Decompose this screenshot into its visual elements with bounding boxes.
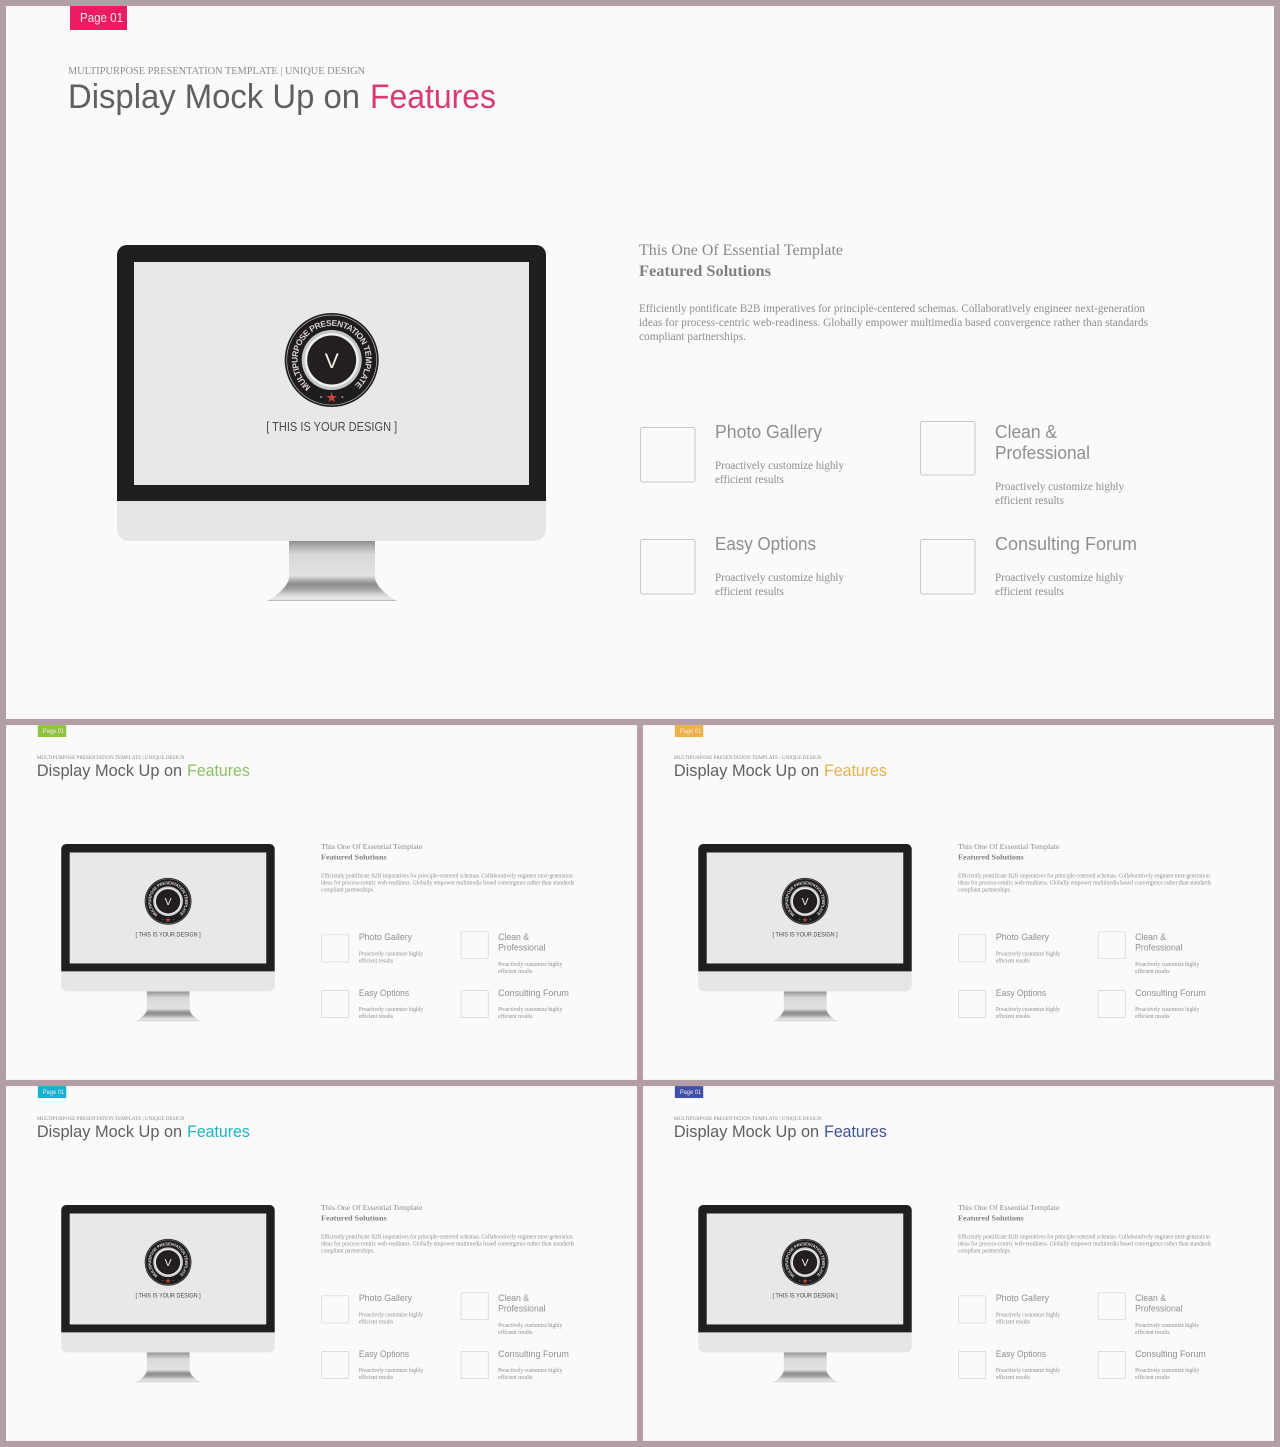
feature: photo gallery: Photo Gallery [715, 422, 822, 442]
logo badge: V [165, 897, 172, 908]
page tag: Page 01 [680, 1089, 702, 1096]
feature: clean and professional: efficient results [1135, 1329, 1170, 1336]
feature: clean and professional: Professional [995, 443, 1090, 463]
logo badge: MULTIPURPOSE PRESENTATION TEMPLATE [785, 881, 825, 917]
panel: navy slide [643, 1086, 1274, 1441]
feature: clean and professional: Clean & [995, 422, 1057, 442]
feature: photo gallery: efficient results [996, 957, 1031, 964]
title block: MULTIPURPOSE PRESENTATION TEMPLATE | UNIQUE DESIGN [37, 755, 185, 761]
feature: photo gallery: Photo Gallery [359, 1293, 413, 1303]
feature: easy options: Easy Options [996, 988, 1047, 998]
intro text: compliant partnerships. [321, 887, 375, 893]
page tag [38, 725, 66, 737]
feature: consulting forum [920, 534, 1137, 598]
feature: consulting forum: Consulting Forum [1135, 988, 1206, 998]
feature: easy options: Easy Options [715, 534, 816, 554]
feature: clean and professional [920, 422, 1124, 507]
feature: consulting forum: efficient results [1135, 1013, 1170, 1020]
feature: consulting forum: Consulting Forum [995, 534, 1137, 554]
feature: photo gallery: Proactively customize highly [715, 460, 844, 472]
feature: consulting forum: efficient results [1135, 1374, 1170, 1381]
title block: Features [187, 1122, 250, 1141]
title block: Features [824, 1122, 887, 1141]
feature: consulting forum: Consulting Forum [1135, 1349, 1206, 1359]
title block: Display Mock Up on [37, 1122, 182, 1141]
feature: easy options: Easy Options [359, 1349, 410, 1359]
intro text: Efficiently pontificate B2B imperatives for principle-centered schemas. Collaboratively engineer next-generation [639, 303, 1145, 315]
panel: orange slide [643, 725, 1274, 1080]
title block: Features [824, 761, 887, 780]
feature: easy options: efficient results [996, 1374, 1031, 1381]
feature: easy options [640, 534, 844, 598]
intro text: Efficiently pontificate B2B imperatives for principle-centered schemas. Collaboratively engineer next-generation [958, 872, 1210, 879]
feature: consulting forum: Proactively customize highly [1135, 1368, 1199, 1374]
feature: easy options: efficient results [359, 1013, 394, 1020]
feature: clean and professional: Proactively customize highly [995, 481, 1124, 493]
title block [68, 65, 496, 116]
screen caption: [ THIS IS YOUR DESIGN ] [135, 932, 201, 939]
feature: easy options: efficient results [359, 1374, 394, 1381]
feature: clean and professional: efficient results [995, 495, 1065, 507]
feature: consulting forum: efficient results [498, 1374, 533, 1381]
feature: photo gallery: efficient results [996, 1318, 1031, 1325]
feature: easy options [322, 988, 423, 1020]
feature: consulting forum [1098, 1349, 1206, 1381]
feature: photo gallery: Photo Gallery [996, 932, 1050, 942]
intro text: Featured Solutions [958, 852, 1024, 861]
feature: photo gallery: Proactively customize highly [996, 1312, 1060, 1318]
feature: consulting forum [461, 1349, 569, 1381]
intro text: ideas for process-centric web-readiness. Globally empower multimedia based convergence rather than standards [321, 879, 575, 886]
logo badge: MULTIPURPOSE PRESENTATION TEMPLATE [148, 1242, 188, 1278]
feature: photo gallery [322, 932, 423, 964]
logo badge: MULTIPURPOSE PRESENTATION TEMPLATE [292, 320, 372, 391]
feature: easy options: Proactively customize highly [996, 1368, 1060, 1374]
feature: clean and professional [461, 1293, 562, 1336]
intro text: Featured Solutions [321, 1213, 387, 1222]
page tag: Page 01 [680, 728, 702, 735]
feature: photo gallery: Photo Gallery [359, 932, 413, 942]
title block: MULTIPURPOSE PRESENTATION TEMPLATE | UNIQUE DESIGN [674, 1116, 822, 1122]
feature: photo gallery: Proactively customize highly [359, 1312, 423, 1318]
title block: Features [370, 78, 496, 116]
feature: clean and professional: Professional [1135, 1304, 1182, 1314]
feature: photo gallery [959, 932, 1060, 964]
feature: consulting forum: Consulting Forum [498, 988, 569, 998]
intro text: Efficiently pontificate B2B imperatives for principle-centered schemas. Collaboratively engineer next-generation [321, 1233, 573, 1240]
screen caption: [ THIS IS YOUR DESIGN ] [772, 1293, 838, 1300]
logo badge: V [165, 1258, 172, 1269]
feature: photo gallery: efficient results [359, 957, 394, 964]
intro text [321, 1203, 575, 1254]
feature: photo gallery: efficient results [359, 1318, 394, 1325]
intro text: ideas for process-centric web-readiness. Globally empower multimedia based convergence rather than standards [321, 1240, 575, 1247]
feature: clean and professional [461, 932, 562, 975]
intro text [639, 242, 1149, 343]
intro text: compliant partnerships. [958, 887, 1012, 893]
feature: clean and professional: efficient results [498, 968, 533, 975]
intro text: Efficiently pontificate B2B imperatives for principle-centered schemas. Collaboratively engineer next-generation [958, 1233, 1210, 1240]
intro text: ideas for process-centric web-readiness. Globally empower multimedia based convergence rather than standards [639, 317, 1149, 329]
feature: consulting forum: Proactively customize highly [498, 1007, 562, 1013]
feature: consulting forum: Proactively customize highly [995, 572, 1124, 584]
feature: easy options [322, 1349, 423, 1381]
intro text [321, 842, 575, 893]
intro text: Featured Solutions [321, 852, 387, 861]
monitor mockup [117, 245, 546, 601]
feature: photo gallery [640, 422, 844, 486]
intro text: compliant partnerships. [958, 1248, 1012, 1254]
title block [674, 755, 887, 780]
feature: easy options: Easy Options [359, 988, 410, 998]
feature: easy options: Proactively customize highly [359, 1368, 423, 1374]
intro text: compliant partnerships. [639, 331, 746, 343]
feature: clean and professional: efficient results [498, 1329, 533, 1336]
logo badge: MULTIPURPOSE PRESENTATION TEMPLATE [785, 1242, 825, 1278]
feature: clean and professional [1098, 932, 1199, 975]
feature: photo gallery [322, 1293, 423, 1325]
screen caption: [ THIS IS YOUR DESIGN ] [772, 932, 838, 939]
feature: easy options: efficient results [715, 586, 785, 598]
feature: consulting forum: Proactively customize highly [498, 1368, 562, 1374]
panel: green slide [6, 725, 637, 1080]
feature: clean and professional: Professional [498, 1304, 545, 1314]
feature: clean and professional: Clean & [1135, 1293, 1166, 1303]
title block: Display Mock Up on [37, 761, 182, 780]
feature: photo gallery [959, 1293, 1060, 1325]
title block: MULTIPURPOSE PRESENTATION TEMPLATE | UNIQUE DESIGN [674, 755, 822, 761]
title block [37, 755, 250, 780]
title block: MULTIPURPOSE PRESENTATION TEMPLATE | UNIQUE DESIGN [68, 65, 365, 77]
intro text: compliant partnerships. [321, 1248, 375, 1254]
feature: clean and professional: Proactively customize highly [498, 962, 562, 968]
feature: consulting forum: Consulting Forum [498, 1349, 569, 1359]
intro text: This One Of Essential Template [958, 1203, 1060, 1212]
monitor mockup [61, 1205, 275, 1382]
intro text: ideas for process-centric web-readiness. Globally empower multimedia based convergence rather than standards [958, 879, 1212, 886]
title block [37, 1116, 250, 1141]
title block: MULTIPURPOSE PRESENTATION TEMPLATE | UNIQUE DESIGN [37, 1116, 185, 1122]
intro text: Featured Solutions [639, 263, 771, 280]
intro text: This One Of Essential Template [321, 1203, 423, 1212]
monitor mockup [61, 844, 275, 1022]
page tag [675, 725, 703, 737]
panel: main slide (pink) [6, 6, 1274, 719]
intro text: This One Of Essential Template [958, 842, 1060, 851]
intro text [958, 1203, 1212, 1254]
page tag: Page 01 [80, 11, 123, 25]
page tag [38, 1086, 66, 1098]
intro text: Efficiently pontificate B2B imperatives for principle-centered schemas. Collaboratively engineer next-generation [321, 872, 573, 879]
intro text: This One Of Essential Template [321, 842, 423, 851]
monitor mockup [698, 1205, 912, 1382]
title block: Display Mock Up on [674, 1122, 819, 1141]
feature: consulting forum [461, 988, 569, 1020]
feature: clean and professional: Proactively customize highly [1135, 1323, 1199, 1329]
logo badge: V [325, 350, 339, 373]
title block: Display Mock Up on [674, 761, 819, 780]
feature: consulting forum [1098, 988, 1206, 1020]
page tag: Page 01 [43, 728, 65, 735]
feature: consulting forum: efficient results [995, 586, 1065, 598]
page tag: Page 01 [43, 1089, 65, 1096]
intro text: Featured Solutions [958, 1213, 1024, 1222]
title block: Display Mock Up on [68, 78, 360, 116]
feature: easy options [959, 988, 1060, 1020]
feature: easy options: Proactively customize highly [359, 1007, 423, 1013]
logo badge: V [802, 897, 809, 908]
intro text: ideas for process-centric web-readiness. Globally empower multimedia based convergence rather than standards [958, 1240, 1212, 1247]
feature: easy options: efficient results [996, 1013, 1031, 1020]
feature: consulting forum: Proactively customize highly [1135, 1007, 1199, 1013]
feature: photo gallery: efficient results [715, 474, 785, 486]
feature: clean and professional: Clean & [498, 932, 529, 942]
logo badge: MULTIPURPOSE PRESENTATION TEMPLATE [148, 881, 188, 917]
feature: clean and professional: Proactively customize highly [498, 1323, 562, 1329]
page tag [675, 1086, 703, 1098]
feature: clean and professional: Professional [498, 943, 545, 953]
feature: easy options: Proactively customize highly [996, 1007, 1060, 1013]
feature: photo gallery: Proactively customize highly [359, 951, 423, 957]
feature: clean and professional: efficient results [1135, 968, 1170, 975]
feature: clean and professional: Clean & [1135, 932, 1166, 942]
title block [674, 1116, 887, 1141]
feature: photo gallery: Proactively customize highly [996, 951, 1060, 957]
screen caption: [ THIS IS YOUR DESIGN ] [266, 420, 397, 434]
monitor mockup [698, 844, 912, 1022]
feature: clean and professional: Clean & [498, 1293, 529, 1303]
page tag [70, 6, 127, 30]
feature: easy options: Proactively customize highly [715, 572, 844, 584]
feature: clean and professional: Professional [1135, 943, 1182, 953]
feature: consulting forum: efficient results [498, 1013, 533, 1020]
title block: Features [187, 761, 250, 780]
feature: clean and professional: Proactively customize highly [1135, 962, 1199, 968]
logo badge: V [802, 1258, 809, 1269]
feature: easy options [959, 1349, 1060, 1381]
panel: cyan slide [6, 1086, 637, 1441]
feature: easy options: Easy Options [996, 1349, 1047, 1359]
screen caption: [ THIS IS YOUR DESIGN ] [135, 1293, 201, 1300]
feature: photo gallery: Photo Gallery [996, 1293, 1050, 1303]
intro text: This One Of Essential Template [639, 242, 843, 259]
intro text [958, 842, 1212, 893]
feature: clean and professional [1098, 1293, 1199, 1336]
